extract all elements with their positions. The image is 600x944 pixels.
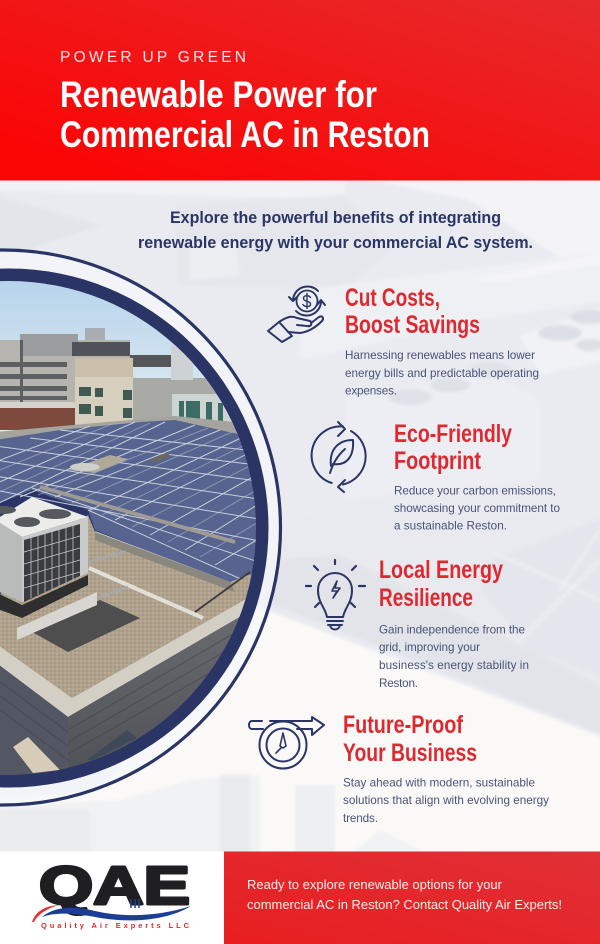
photo scene (0, 270, 265, 790)
description (343, 776, 549, 825)
heading: Boost Savings (345, 311, 480, 339)
description: grid, improving your (379, 641, 480, 654)
heading: Cut Costs, (345, 284, 440, 312)
description: trends. (343, 812, 378, 825)
logo swoosh (32, 899, 191, 922)
intro text: Explore the powerful benefits of integrating (170, 208, 501, 227)
footer logo panel (0, 852, 224, 944)
description: business's energy stability in (379, 659, 529, 672)
heading (379, 556, 503, 612)
inner ring (0, 268, 268, 788)
eyebrow text: POWER UP GREEN (60, 49, 246, 66)
item 1: cut costs (268, 284, 539, 398)
description: showcasing your commitment to (394, 502, 560, 515)
title: Commercial AC in Reston (60, 114, 430, 155)
item 3: local energy (306, 556, 529, 690)
icon: gauge with arrow (249, 717, 324, 768)
description (345, 349, 539, 398)
icon: light bulb (306, 560, 365, 630)
item 4: future-proof (249, 711, 549, 825)
heading: Footprint (394, 447, 482, 475)
title (60, 74, 430, 155)
heading: Your Business (343, 739, 477, 767)
intro text (138, 208, 533, 252)
heading: Eco-Friendly (394, 420, 512, 448)
description: Harnessing renewables means lower (345, 349, 535, 362)
description: Reduce your carbon emissions, (394, 484, 556, 498)
rooftop AC unit (17, 592, 97, 640)
header band (0, 0, 600, 180)
description (394, 484, 560, 532)
circular rooftop photo (0, 250, 280, 805)
description: solutions that align with evolving energy (343, 794, 549, 807)
shadow (25, 600, 140, 652)
footer call to action: commercial AC in Reston? Contact Quality Air Experts! (247, 897, 562, 912)
outer ring (0, 250, 280, 805)
footer call to action (224, 852, 600, 944)
icon: leaf in recycling arrows (312, 422, 366, 492)
gravel roof (0, 515, 262, 698)
item 2: eco-friendly (312, 420, 560, 532)
heading: Future-Proof (343, 711, 464, 739)
description: expenses. (345, 384, 397, 398)
description: Stay ahead with modern, sustainable (343, 776, 535, 790)
heading: Resilience (379, 584, 473, 612)
icon: hand with dollar coin (268, 286, 325, 342)
description (379, 624, 529, 690)
footer call to action: Ready to explore renewable options for your (247, 877, 503, 892)
heading: Local Energy (379, 556, 503, 584)
description: a sustainable Reston. (394, 520, 507, 532)
title: Renewable Power for (60, 74, 377, 115)
solar panels (0, 420, 256, 600)
heading (394, 420, 512, 475)
heading (343, 711, 477, 767)
heading (345, 284, 480, 339)
logo letters: QAE (39, 856, 190, 916)
page background: faded rooftop photo (0, 175, 600, 860)
description: energy bills and predictable operating (345, 367, 539, 380)
parapet (0, 600, 246, 717)
logo tagline: Quality Air Experts LLC (41, 921, 190, 930)
building walls (0, 666, 68, 775)
description: Reston. (379, 677, 418, 690)
pipes (89, 568, 203, 618)
description: Gain independence from the (379, 624, 525, 636)
intro text: renewable energy with your commercial AC system. (138, 233, 533, 252)
